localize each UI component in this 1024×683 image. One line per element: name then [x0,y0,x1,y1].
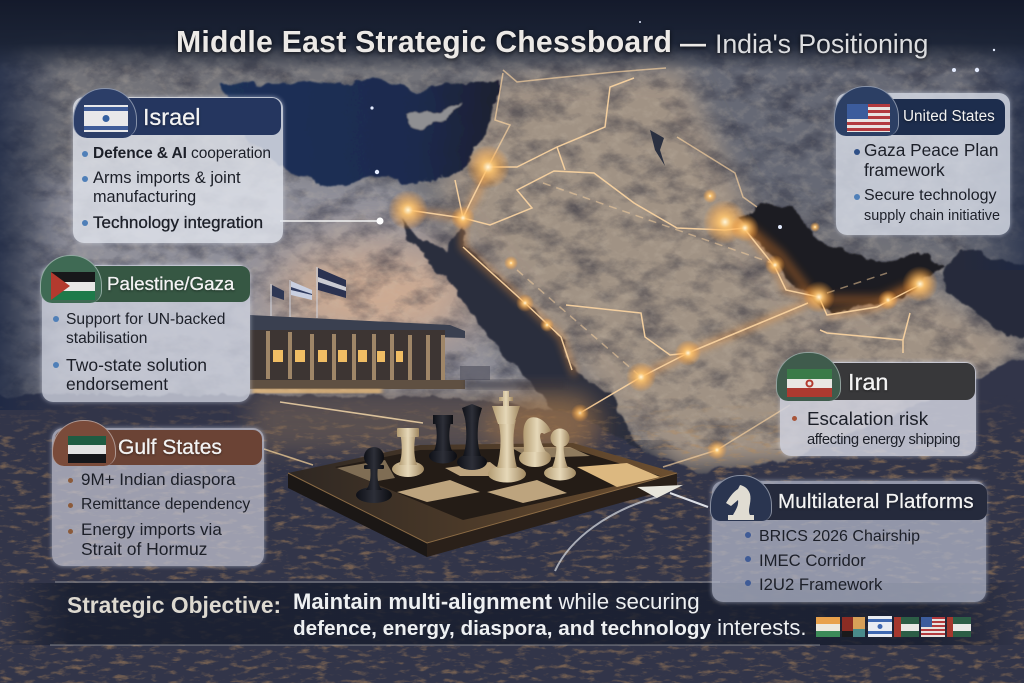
panel: Palestine/Gaza: Support for UN-backed [66,311,225,328]
title: India's Positioning [715,29,928,59]
top darkening [0,0,1024,72]
dusk sky glow [270,243,480,347]
panel: United States: framework [864,160,945,180]
panel: Iran [780,362,976,456]
bottom strip [0,583,1024,645]
title [176,26,929,62]
bullet list: Israel [82,145,271,232]
header: Gulf States: Gulf States [118,436,222,459]
bullet list: United States [854,140,1000,224]
bullet text: Iran [792,408,960,448]
bullet list: Multilateral Platforms [745,528,920,594]
header: Gulf States [55,430,262,465]
panel: United States: supply chain initiative [864,208,1000,224]
Arabian peninsula [440,70,1024,470]
panel: Gulf States: Strait of Hormuz [81,539,207,559]
panel: Palestine/Gaza: Two-state solution [66,355,207,375]
panel: Israel: manufacturing [93,188,196,206]
title: — [680,28,706,58]
board reflected glow [485,395,605,455]
icon: Iran flag [776,352,841,401]
strategic objective text: defence, energy, diaspora, and technology interests. [293,615,806,640]
flag: Iran [947,617,971,637]
north-east land [670,40,1024,260]
flags row [816,616,971,637]
route network [408,68,920,467]
lower speckled ground [0,395,1024,683]
bullet list: Palestine/Gaza [53,311,225,394]
lines toward chessboard [264,402,423,465]
panel: Palestine/Gaza [42,265,250,402]
bullet list: Gulf States [68,470,250,559]
panel: Israel [73,97,283,243]
lake [650,130,665,166]
land highlights [0,30,1024,450]
header: United States: United States [903,108,995,125]
strategic objective text: Maintain multi-alignment while securing [293,589,700,614]
header: Iran [780,363,975,400]
flag: Israel [868,616,892,637]
panel: Gulf States: Remittance dependency [81,496,250,513]
route network glow [408,167,925,377]
panel: United States: Secure technology [864,187,997,204]
Persian Gulf warm glow [745,225,925,300]
chessboard [288,391,677,557]
icon: UAE flag [52,420,116,466]
panel: Israel: Arms imports & joint [93,169,241,187]
arrow to chessboard [555,485,708,571]
strategic objective label: Strategic Objective: [67,592,281,618]
header: Israel [78,98,281,135]
panel: United States: Gaza Peace Plan [864,140,998,160]
panel: Palestine/Gaza: stabilisation [66,330,147,347]
panel: Iran: Escalation risk [807,408,928,429]
chess pieces [356,391,576,503]
header: Multilateral Platforms: Multilateral Platforms [778,490,974,513]
strategic objective text [293,589,806,640]
flag: India [816,617,840,637]
header: United States [839,99,1005,135]
panel: Multilateral Platforms: BRICS 2026 Chairship [759,528,920,545]
icon: Palestine flag [40,255,102,303]
land base [0,30,1024,440]
map texture [0,30,1024,450]
Egypt and Levant land [30,170,540,400]
building scene [250,267,565,393]
panel: Gulf States [52,428,264,566]
header: Israel: Israel [143,104,200,130]
panel: United States [836,93,1010,235]
header: Palestine/Gaza: Palestine/Gaza [107,273,234,294]
panel: Multilateral Platforms: I2U2 Framework [759,575,882,594]
panel: Israel: Defence & AI cooperation [93,145,271,162]
connector: Israel to map [280,218,384,224]
flag: Gulf [842,617,865,637]
flag: United States [921,617,945,637]
header: Palestine/Gaza [45,266,250,302]
route hubs [388,145,938,460]
panel: Gulf States: 9M+ Indian diaspora [81,470,236,489]
dusk-lit water behind chessboard [250,392,590,452]
title: Middle East Strategic Chessboard [176,26,672,59]
flag: Palestine [894,617,919,637]
header: Multilateral Platforms [714,484,987,520]
icon: knight [710,475,772,521]
panel: Multilateral Platforms [712,481,986,602]
panel: Multilateral Platforms: IMEC Corridor [759,551,866,570]
edge darkening [0,30,70,410]
icon: Israel flag [73,88,137,138]
panel: Israel: Technology integration [93,213,263,232]
panel: Palestine/Gaza: endorsement [66,374,168,394]
panel: Iran: affecting energy shipping [807,432,960,448]
header: Iran: Iran [848,369,888,395]
panel: Gulf States: Energy imports via [81,520,222,539]
stars [370,21,995,229]
icon: US flag [834,86,899,136]
